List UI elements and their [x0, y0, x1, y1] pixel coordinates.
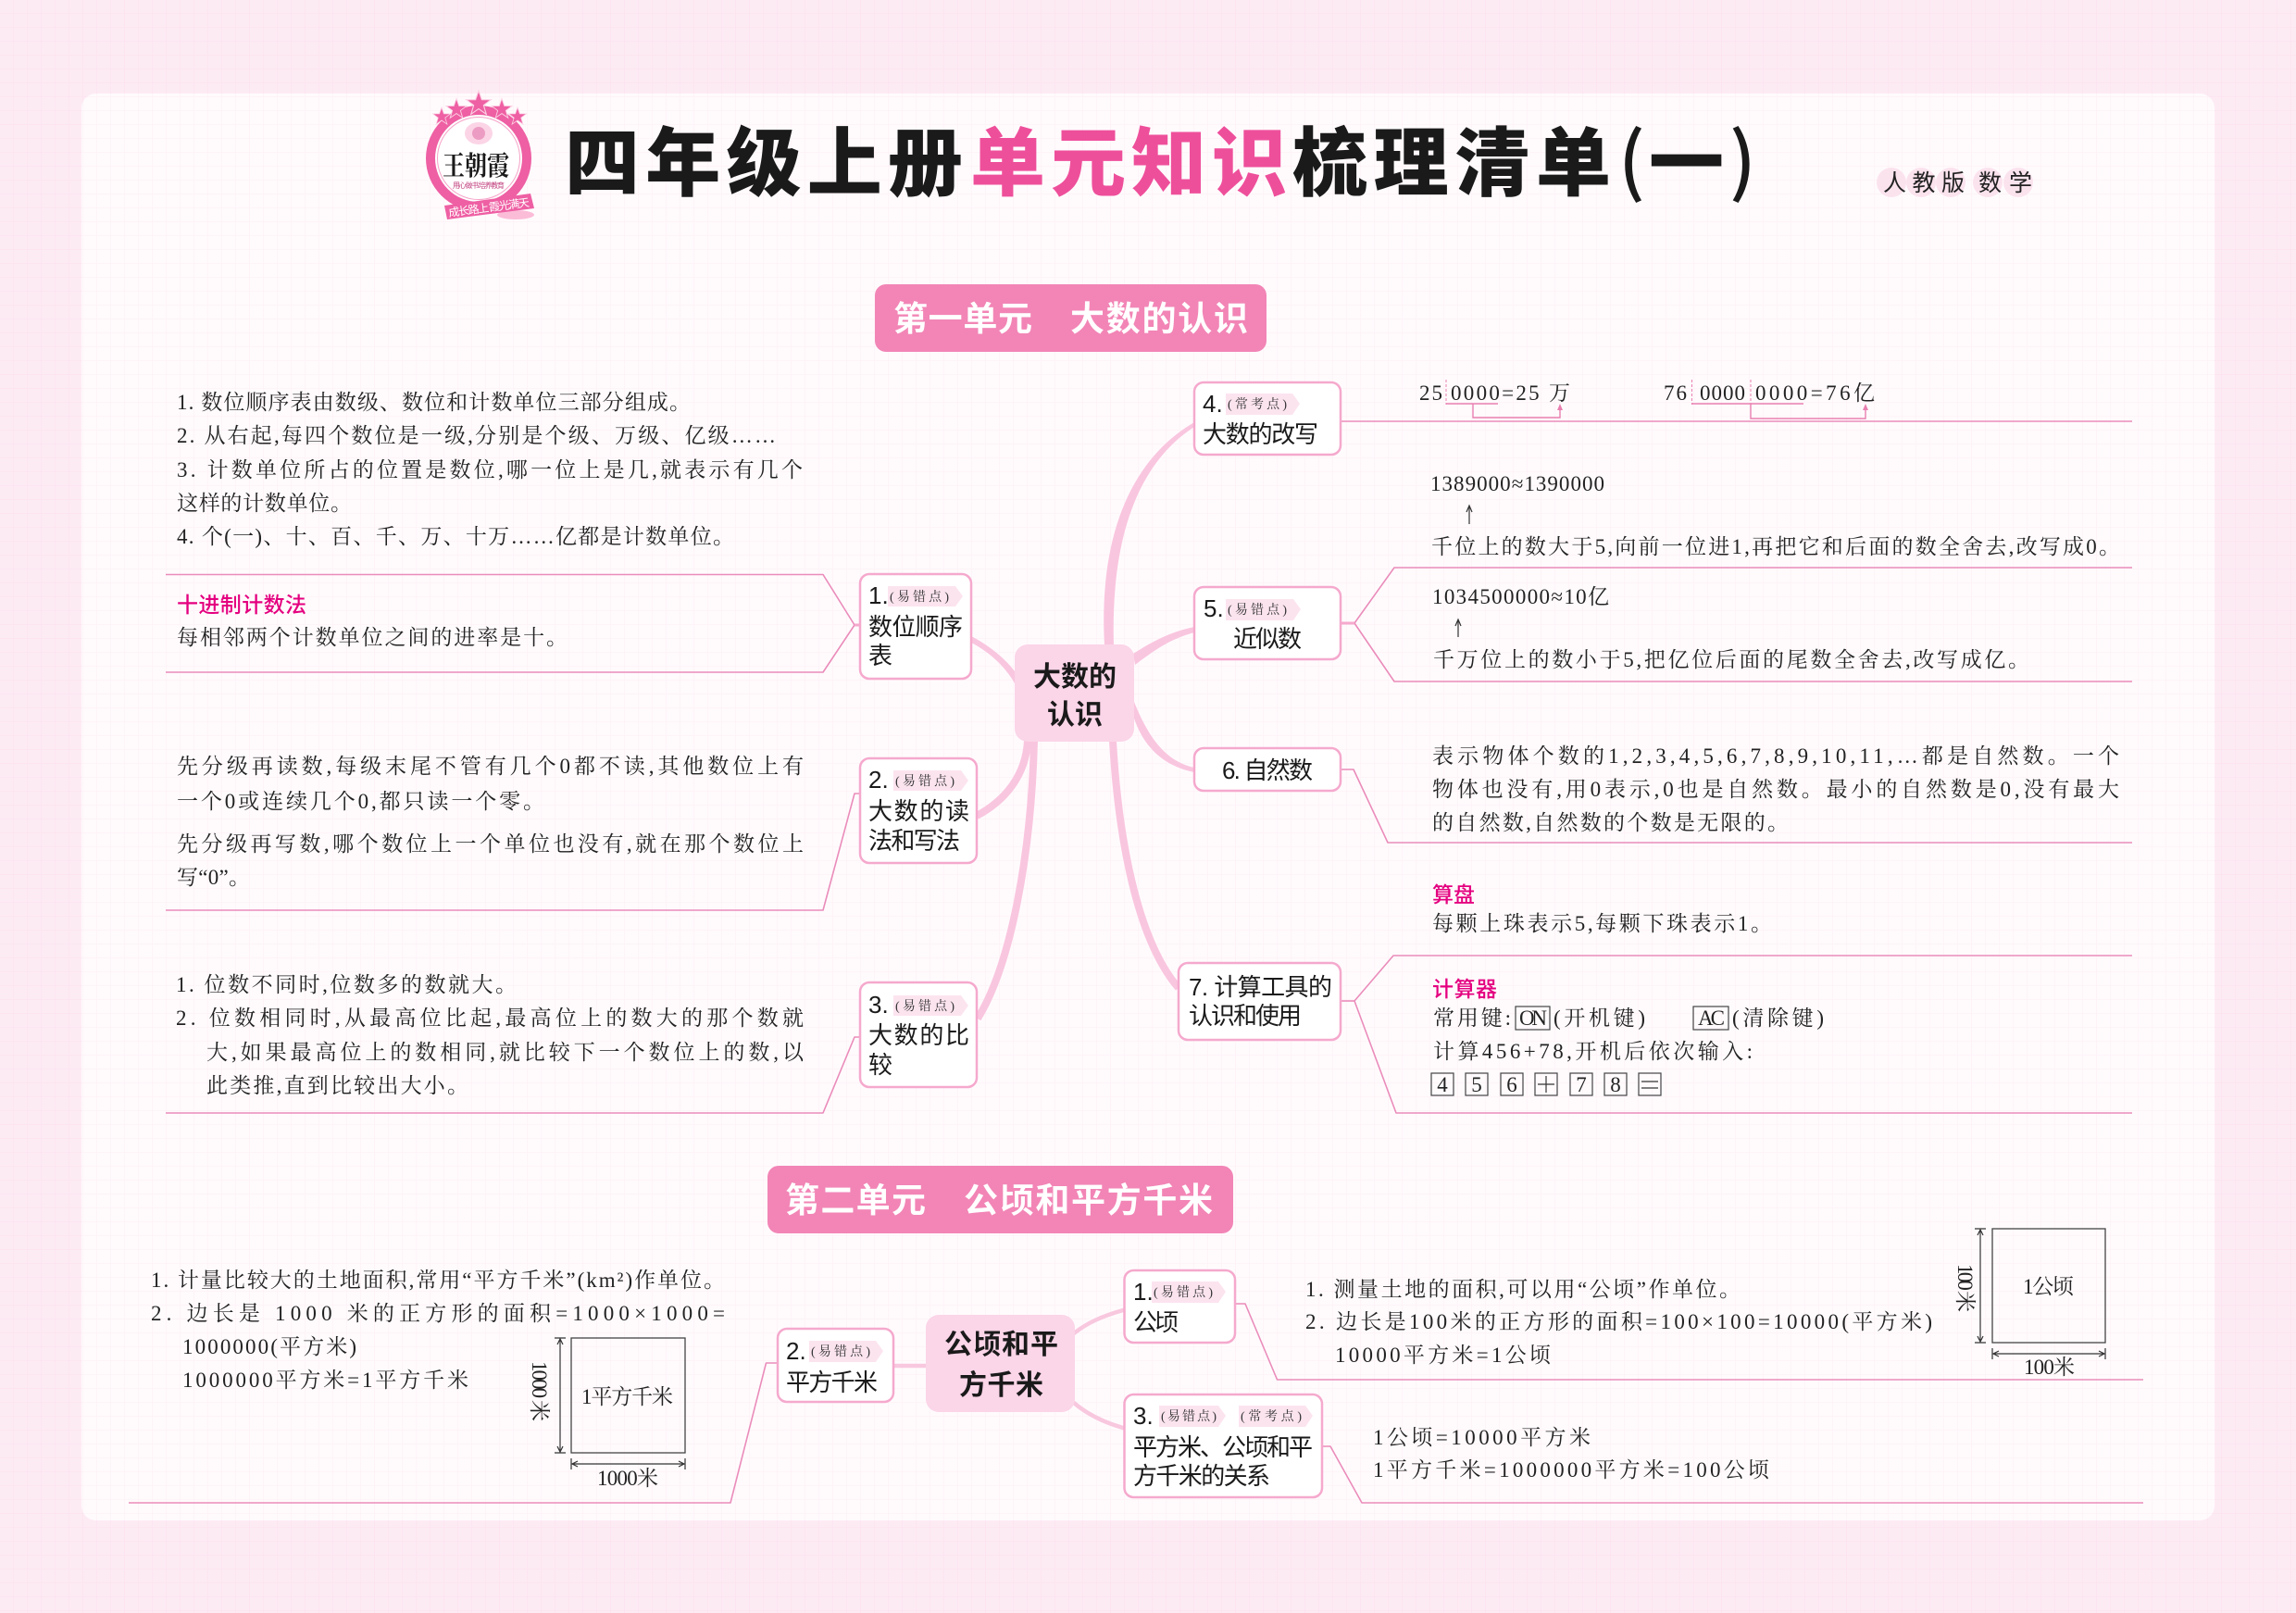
text block: number place table: 这样的计数单位。	[177, 492, 352, 515]
formula: 25 0000 = 25 万	[1419, 380, 1570, 418]
text block: abacus	[1432, 882, 1772, 935]
text block: rounding up	[1430, 472, 2120, 558]
text block: calculator: 计算456+78,开机后依次输入:	[1433, 1040, 1753, 1063]
text block: abacus: 每颗上珠表示5,每颗下珠表示1。	[1432, 912, 1772, 935]
central node: 大数的认识	[1015, 644, 1134, 742]
logo: 王朝霞 badge: 用心做书 培养教育	[453, 181, 505, 191]
node 2: 大数的读法和写法: 法和写法	[868, 827, 960, 855]
node: 公顷	[1124, 1270, 1235, 1343]
calculator keys: 7	[1576, 1073, 1587, 1096]
text block: calculator: AC	[1698, 1007, 1725, 1030]
formula: 25 0000 = 25 万: 25	[1419, 381, 1442, 405]
heading: unit 2: 公顷和平方千米	[964, 1172, 1213, 1222]
node 3: 大数的比较: 3.	[868, 991, 889, 1019]
text block: unit relationships: 1平方千米=1000000平方米=100公顷	[1373, 1458, 1769, 1482]
title	[565, 102, 1756, 212]
node 1: 数位顺序表: 表	[868, 642, 892, 669]
diagram: 1 square kilometre	[528, 1338, 685, 1490]
edition tag: 人教版 数学: 人教版	[1883, 165, 1965, 198]
formula: 76 0000 0000 = 76 亿	[1664, 380, 1875, 419]
node 3: 大数的比较	[860, 982, 977, 1087]
formula: 76 0000 0000 = 76 亿: 76	[1664, 381, 1687, 405]
node 4: 大数的改写: (常考点)	[1228, 396, 1287, 412]
text block: rounding down: 1034500000≈10亿	[1432, 585, 1609, 608]
text block: hectare: 2. 边长是100米的正方形的面积=100×100=10000(平方米)	[1305, 1310, 1932, 1333]
text block: comparison: 1. 位数不同时,位数多的数就大。	[176, 973, 517, 996]
central node: 大数的认识: 认识	[1047, 692, 1103, 732]
node 2: 大数的读法和写法: 大数的读	[868, 797, 969, 825]
node: 平方千米: (易错点)	[811, 1344, 870, 1359]
node: 平方米、公顷和平方千米的关系: 平方米、公顷和平	[1133, 1433, 1313, 1461]
callout: decimal counting	[177, 593, 568, 649]
node 3: 大数的比较: (易错点)	[895, 998, 955, 1014]
node 4: 大数的改写: 大数的改写	[1203, 420, 1318, 448]
text block: hectare: 10000平方米=1公顷	[1335, 1344, 1551, 1367]
node 1: 数位顺序表: 1.	[868, 581, 889, 609]
node: 平方米、公顷和平方千米的关系: (常考点)	[1241, 1408, 1302, 1424]
text block: rounding down	[1432, 585, 2029, 671]
node 2: 大数的读法和写法: (易错点)	[895, 773, 955, 789]
edition tag: 人教版 数学	[1877, 165, 2033, 198]
callout: decimal counting: 每相邻两个计数单位之间的进率是十。	[177, 626, 568, 649]
diagram: 1 square kilometre: 1000 米	[528, 1361, 551, 1421]
formula: 25 0000 = 25 万: 0000=25 万	[1451, 381, 1570, 405]
title: 单元知识	[970, 104, 1287, 212]
text block: reading and writing: 写“0”。	[177, 866, 250, 889]
text block: number place table: 2. 从右起,每四个数位是一级,分别是个级、万级、亿级……	[177, 424, 776, 447]
title: 一	[1649, 104, 1724, 212]
text block: number place table: 1. 数位顺序表由数级、数位和计数单位三部分组成。	[177, 391, 691, 414]
text block: number place table: 4. 个(一)、十、百、千、万、十万……亿都是计数单位。	[177, 525, 734, 548]
callout: decimal counting: 十进制计数法	[177, 593, 306, 617]
text block: calculator	[1431, 977, 1824, 1096]
text block: reading and writing: 先分级再读数,每级末尾不管有几个0都不读,其他数位上有	[177, 755, 804, 778]
node 6: 自然数: 6. 自然数	[1222, 756, 1313, 784]
text block: abacus: 算盘	[1432, 882, 1475, 907]
node 1: 数位顺序表	[860, 574, 971, 679]
text block: comparison: 2. 位数相同时,从最高位比起,最高位上的数大的那个数就	[176, 1007, 804, 1030]
heading: unit 2: 第二单元	[785, 1172, 926, 1222]
text block: comparison	[176, 973, 805, 1097]
node 7: 计算工具的认识和使用: 7. 计算工具的	[1189, 973, 1332, 1001]
heading: unit 1: 第一单元	[893, 291, 1032, 341]
text block: reading and writing: 一个0或连续几个0,都只读一个零。	[177, 790, 544, 813]
formula: 76 0000 0000 = 76 亿: 0000=76亿	[1755, 381, 1875, 405]
title: (	[1618, 102, 1645, 210]
text block: square kilometre: 1. 计量比较大的土地面积,常用“平方千米”(km²)作单位。	[151, 1269, 725, 1292]
text block: comparison: 此类推,直到比较出大小。	[206, 1074, 468, 1097]
node 4: 大数的改写	[1194, 382, 1341, 455]
node 6: 自然数	[1194, 748, 1341, 791]
text block: rounding down: 千万位上的数小于5,把亿位后面的尾数全舍去,改写成亿。	[1433, 648, 2029, 671]
formula: 76 0000 0000 = 76 亿: 0000	[1700, 381, 1745, 405]
node 1: 数位顺序表: (易错点)	[890, 589, 949, 605]
text block: hectare	[1305, 1278, 1932, 1367]
node: 平方米、公顷和平方千米的关系: 方千米的关系	[1133, 1462, 1270, 1490]
text block: number place table: 3. 计数单位所占的位置是数位,哪一位上是几,就表示有几个	[177, 458, 803, 481]
node: 公顷: 公顷	[1133, 1308, 1179, 1336]
text block: hectare: 1. 测量土地的面积,可以用“公顷”作单位。	[1305, 1278, 1741, 1301]
heading: unit 1: 大数的认识	[1070, 291, 1248, 341]
title: )	[1729, 102, 1756, 210]
text block: unit relationships	[1373, 1426, 1769, 1482]
node 5: 近似数: 5.	[1204, 594, 1224, 622]
node 1: 数位顺序表: 数位顺序	[868, 613, 963, 641]
text block: calculator: ON	[1519, 1007, 1547, 1030]
text block: square kilometre: 1000000(平方米)	[182, 1335, 356, 1358]
edition tag: 人教版 数学: 数学	[1978, 165, 2032, 198]
text block: natural numbers: 表示物体个数的1,2,3,4,5,6,7,8,9,10,11,…都是自然数。一个	[1432, 744, 2119, 768]
node: 公顷: (易错点)	[1154, 1284, 1213, 1300]
node: 平方千米: 平方千米	[786, 1369, 878, 1396]
node: 平方米、公顷和平方千米的关系: (易错点)	[1161, 1408, 1217, 1424]
text block: reading and writing	[177, 755, 804, 889]
text block: square kilometre: 2. 边长是 1000 米的正方形的面积=1000×1000=	[151, 1302, 725, 1325]
title: 四年级上册	[565, 104, 963, 212]
text block: number place table	[177, 391, 803, 548]
text block: rounding up: 1389000≈1390000	[1430, 472, 1604, 495]
connector lines: unit 1	[166, 421, 2132, 1113]
node 5: 近似数	[1194, 587, 1341, 659]
text block: calculator: 计算器	[1432, 977, 1497, 1001]
text block: square kilometre	[151, 1269, 725, 1392]
diagram: 1 hectare	[1953, 1229, 2105, 1379]
node: 平方千米	[778, 1329, 893, 1402]
logo: 王朝霞 badge	[426, 91, 534, 220]
logo: 王朝霞 badge: 王朝霞	[443, 145, 509, 183]
mind map branches: unit 2	[894, 1310, 1123, 1428]
calculator keys: 6	[1506, 1073, 1517, 1096]
heading: unit 2	[767, 1166, 1233, 1233]
text block: calculator: 常用键:	[1433, 1007, 1511, 1030]
central node: 公顷和平方千米	[926, 1315, 1075, 1412]
node 2: 大数的读法和写法: 2.	[868, 766, 889, 794]
central node: 公顷和平方千米: 公顷和平	[944, 1321, 1058, 1362]
logo: 王朝霞 badge: 成长路上 霞光满天	[447, 194, 530, 220]
text block: calculator: (清除键)	[1732, 1007, 1824, 1030]
text block: calculator: (开机键)	[1554, 1007, 1645, 1030]
calculator keys: 5	[1471, 1073, 1482, 1096]
text block: natural numbers: 的自然数,自然数的个数是无限的。	[1432, 811, 1789, 834]
text block: square kilometre: 1000000平方米=1平方千米	[182, 1369, 468, 1392]
node: 公顷: 1.	[1133, 1278, 1154, 1306]
text block: natural numbers: 物体也没有,用0表示,0也是自然数。最小的自然数是0,没有最大	[1432, 778, 2119, 801]
text block: unit relationships: 1公顷=10000平方米	[1373, 1426, 1591, 1449]
central node: 公顷和平方千米: 方千米	[959, 1362, 1043, 1403]
node 7: 计算工具的认识和使用	[1179, 963, 1341, 1040]
diagram: 1 hectare: 100 米	[1953, 1264, 1977, 1312]
title: 梳理清单	[1292, 104, 1611, 212]
calculator keys	[1431, 1073, 1661, 1096]
node 3: 大数的比较: 较	[868, 1051, 892, 1079]
node: 平方千米: 2.	[786, 1337, 806, 1365]
node: 平方米、公顷和平方千米的关系	[1124, 1394, 1322, 1497]
text block: comparison: 大,如果最高位上的数相同,就比较下一个数位上的数,以	[206, 1041, 805, 1064]
diagram: 1 hectare: 100米	[2024, 1356, 2075, 1379]
mind map branches: unit 1	[971, 422, 1194, 1019]
calculator keys: 8	[1610, 1073, 1621, 1096]
text block: rounding up: 千位上的数大于5,向前一位进1,再把它和后面的数全舍去,改写成0。	[1431, 535, 2120, 558]
node 3: 大数的比较: 大数的比	[868, 1021, 969, 1049]
node: 平方米、公顷和平方千米的关系: 3.	[1133, 1402, 1154, 1430]
diagram: 1 square kilometre: 1000米	[597, 1467, 658, 1490]
text block: natural numbers	[1432, 744, 2119, 834]
node 5: 近似数: 近似数	[1233, 625, 1302, 653]
diagram: 1 hectare: 1公顷	[2023, 1275, 2074, 1298]
node 7: 计算工具的认识和使用: 认识和使用	[1189, 1002, 1302, 1030]
node 5: 近似数: (易错点)	[1228, 602, 1287, 618]
calculator keys: 4	[1437, 1073, 1448, 1096]
central node: 大数的认识: 大数的	[1033, 654, 1117, 694]
node 4: 大数的改写: 4.	[1203, 390, 1223, 418]
diagram: 1 square kilometre: 1平方千米	[581, 1385, 673, 1408]
text block: reading and writing: 先分级再写数,哪个数位上一个单位也没有,就在那个数位上	[177, 832, 804, 856]
node 2: 大数的读法和写法	[860, 758, 977, 863]
connector lines: unit 2	[129, 1304, 2143, 1503]
heading: unit 1	[875, 284, 1267, 352]
